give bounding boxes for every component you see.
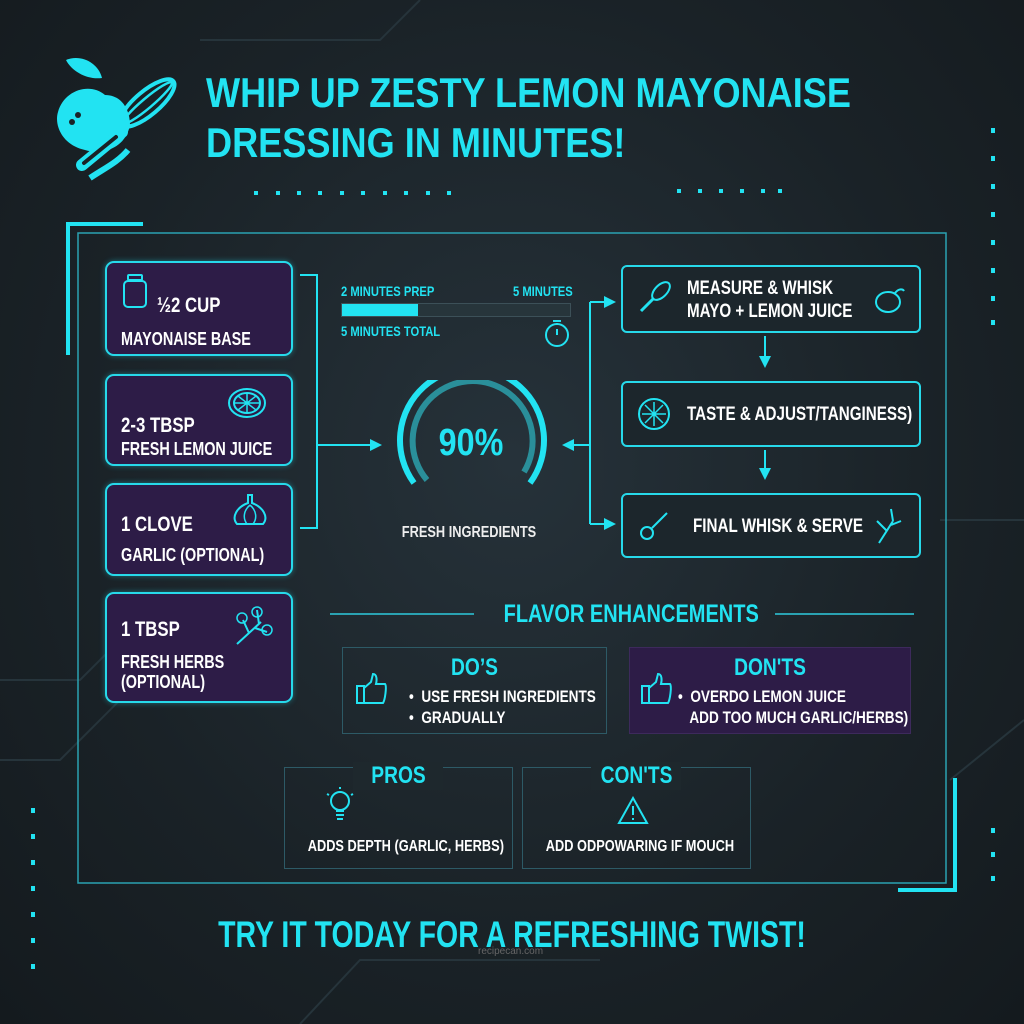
step 3: final whisk & serve: FINAL WHISK & SERVE [693,516,863,537]
ingredient: mayonnaise: MAYONAISE BASE [121,329,251,349]
step 2: taste & adjust [621,381,921,447]
timer bar: 5 MINUTES [513,283,573,299]
step 1: measure & whisk [621,265,921,333]
ingredient: herbs: FRESH HERBS [121,652,224,672]
panel: do's: • GRADUALLY [409,708,505,727]
timer bar: 2 MINUTES PREP [341,283,434,299]
panel: cons: CON'TS [601,762,672,789]
icon: lemon and whisk [57,58,176,180]
icon: spoon [640,512,668,540]
panel: don'ts: ADD TOO MUCH GARLIC/HERBS) [689,708,908,727]
ingredient: lemon juice: FRESH LEMON JUICE [121,439,272,459]
ingredient: herbs [105,592,293,703]
panel: cons: ADD ODPOWARING IF MOUCH [546,838,734,855]
panel: cons [522,767,751,869]
step 2: taste & adjust: TASTE & ADJUST/TANGINESS) [687,404,912,425]
icon: jar [123,274,147,308]
panel: pros [284,767,513,869]
ingredient: lemon juice [105,374,293,466]
ingredient: garlic [105,483,293,576]
panel: don'ts [629,647,911,734]
icon: warning [617,796,649,824]
panel: do's: • USE FRESH INGREDIENTS [409,687,596,706]
heading: flavor enhancements: FLAVOR ENHANCEMENTS [504,600,759,628]
step 1: measure & whisk: MAYO + LEMON JUICE [687,301,852,322]
panel: pros: ADDS DEPTH (GARLIC, HERBS) [308,838,504,855]
icon: stopwatch [545,320,569,347]
icon: whisk [640,281,671,312]
step 3: final whisk & serve [621,493,921,558]
ingredient: garlic: GARLIC (OPTIONAL) [121,545,264,565]
timer bar [341,283,573,347]
icon: lemon [875,288,905,313]
gauge 90% [397,380,547,541]
ingredient: garlic: 1 CLOVE [121,513,193,536]
footer call to action: TRY IT TODAY FOR A REFRESHING TWIST! [218,914,806,955]
ingredient: lemon juice: 2-3 TBSP [121,414,195,437]
panel: do's: DO’S [451,654,498,681]
panel: don'ts: • OVERDO LEMON JUICE [678,687,846,706]
ingredient: mayonnaise: ½2 CUP [157,294,220,317]
icon: lemon slice [638,398,670,430]
icon: parsley [236,606,273,645]
title: WHIP UP ZESTY LEMON MAYONAISE [206,69,851,116]
icon: thumbs [641,673,672,704]
icon: garlic [234,494,266,525]
icon: herb [876,508,902,544]
panel: don'ts: DON'TS [734,654,806,681]
icon: light bulb [326,787,354,820]
panel: do's [342,647,607,734]
timer bar: 5 MINUTES TOTAL [341,323,440,339]
title: DRESSING IN MINUTES! [206,119,625,166]
title [206,69,851,166]
gauge 90%: 90% [439,422,503,464]
step 1: measure & whisk: MEASURE & WHISK [687,278,833,299]
gauge 90%: FRESH INGREDIENTS [402,524,536,541]
ingredient: herbs: 1 TBSP [121,618,180,641]
ingredient: mayonnaise [105,261,293,356]
icon: lemon slice [228,388,266,418]
ingredient: herbs: (OPTIONAL) [121,672,205,692]
watermark: recipecan.com [478,946,543,957]
icon: thumbs up [356,673,387,704]
panel: pros: PROS [371,762,426,789]
